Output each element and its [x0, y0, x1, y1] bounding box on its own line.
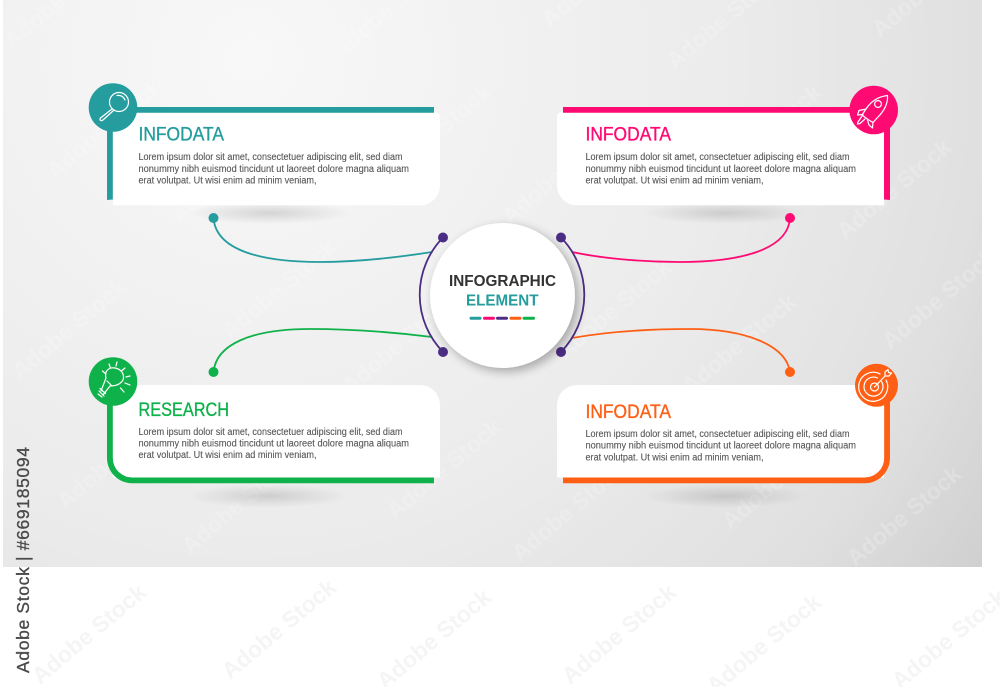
text block: pink: Lorem ipsum dolor sit amet, consectetuer adipiscing elit, sed diam — [586, 152, 850, 163]
text block: teal — [138, 152, 409, 186]
watermark pattern: Adobe Stock — [717, 423, 841, 534]
heading: infodata teal: INFODATA — [138, 125, 224, 146]
heading: research: RESEARCH — [138, 400, 229, 421]
text block: orange — [586, 429, 856, 463]
text block: green: erat volutpat. Ut wisi enim ad minim veniam, — [138, 450, 316, 461]
connector: pink — [572, 213, 795, 262]
text block: green: Lorem ipsum dolor sit amet, consectetuer adipiscing elit, sed diam — [138, 427, 402, 438]
watermark pattern: Adobe Stock — [507, 455, 631, 566]
text block: pink: nonummy nibh euismod tincidunt ut laoreet dolore magna aliquam — [586, 164, 856, 175]
watermark pattern: Adobe Stock — [552, 253, 676, 364]
text block: teal: nonummy nibh euismod tincidunt ut laoreet dolore magna aliquam — [138, 164, 409, 175]
panel: orange card — [557, 364, 898, 483]
watermark pattern: Adobe Stock — [372, 78, 496, 189]
watermark pattern: Adobe Stock — [677, 288, 801, 399]
watermark pattern: Adobe Stock — [832, 133, 956, 244]
watermark pattern: Adobe Stock — [27, 578, 151, 687]
text block: teal: Lorem ipsum dolor sit amet, consectetuer adipiscing elit, sed diam — [138, 152, 402, 163]
icon: light bulb — [98, 362, 130, 397]
watermark pattern: Adobe Stock — [7, 273, 131, 384]
arc: right — [556, 232, 584, 357]
text block: pink: erat volutpat. Ut wisi enim ad minim veniam, — [586, 176, 764, 186]
arc: left — [420, 232, 448, 357]
title: INFOGRAPHIC — [449, 273, 556, 290]
watermark pattern: Adobe Stock — [177, 448, 301, 559]
text block: orange: Lorem ipsum dolor sit amet, consectetuer adipiscing elit, sed diam — [586, 429, 850, 440]
connector: green — [208, 329, 432, 377]
heading: infodata orange: INFODATA — [586, 402, 671, 423]
text block: green: nonummy nibh euismod tincidunt ut laoreet dolore magna aliquam — [138, 438, 409, 450]
icon: target — [859, 370, 892, 401]
heading: infodata pink: INFODATA — [586, 125, 671, 146]
watermark pattern: Adobe Stock — [382, 413, 506, 524]
connector: orange — [572, 329, 795, 377]
panel: pink card — [557, 86, 898, 205]
watermark pattern: Adobe Stock — [42, 73, 166, 184]
text block: pink — [586, 152, 856, 186]
subtitle: ELEMENT — [466, 293, 539, 310]
watermark pattern: Adobe Stock — [52, 403, 176, 514]
watermark pattern: Adobe Stock — [337, 288, 461, 399]
panel: green card — [89, 357, 440, 483]
connector: teal — [208, 213, 432, 262]
watermark pattern: Adobe Stock — [217, 573, 341, 684]
panel: teal card — [89, 83, 440, 205]
watermark pattern: Adobe Stock — [167, 118, 291, 229]
center hub — [420, 223, 584, 372]
icon: magnifying glass — [100, 92, 128, 121]
text block: green — [138, 427, 409, 461]
text block: orange: nonummy nibh euismod tincidunt ut laoreet dolore magna aliquam — [586, 441, 856, 452]
stock id label: Adobe Stock | #669185094 — [13, 447, 33, 673]
watermark pattern: Adobe Stock — [497, 118, 621, 229]
watermark pattern: Adobe Stock — [217, 233, 341, 344]
watermark pattern: Adobe Stock — [877, 243, 1000, 354]
watermark pattern: Adobe Stock — [842, 460, 966, 571]
watermark pattern: Adobe Stock — [702, 78, 826, 189]
text block: teal: erat volutpat. Ut wisi enim ad minim veniam, — [138, 176, 316, 186]
colour dashes — [471, 317, 534, 320]
card shadows — [186, 202, 807, 508]
text block: orange: erat volutpat. Ut wisi enim ad minim veniam, — [586, 452, 764, 463]
icon: rocket — [858, 96, 888, 128]
watermark pattern: Adobe Stock — [557, 578, 681, 687]
